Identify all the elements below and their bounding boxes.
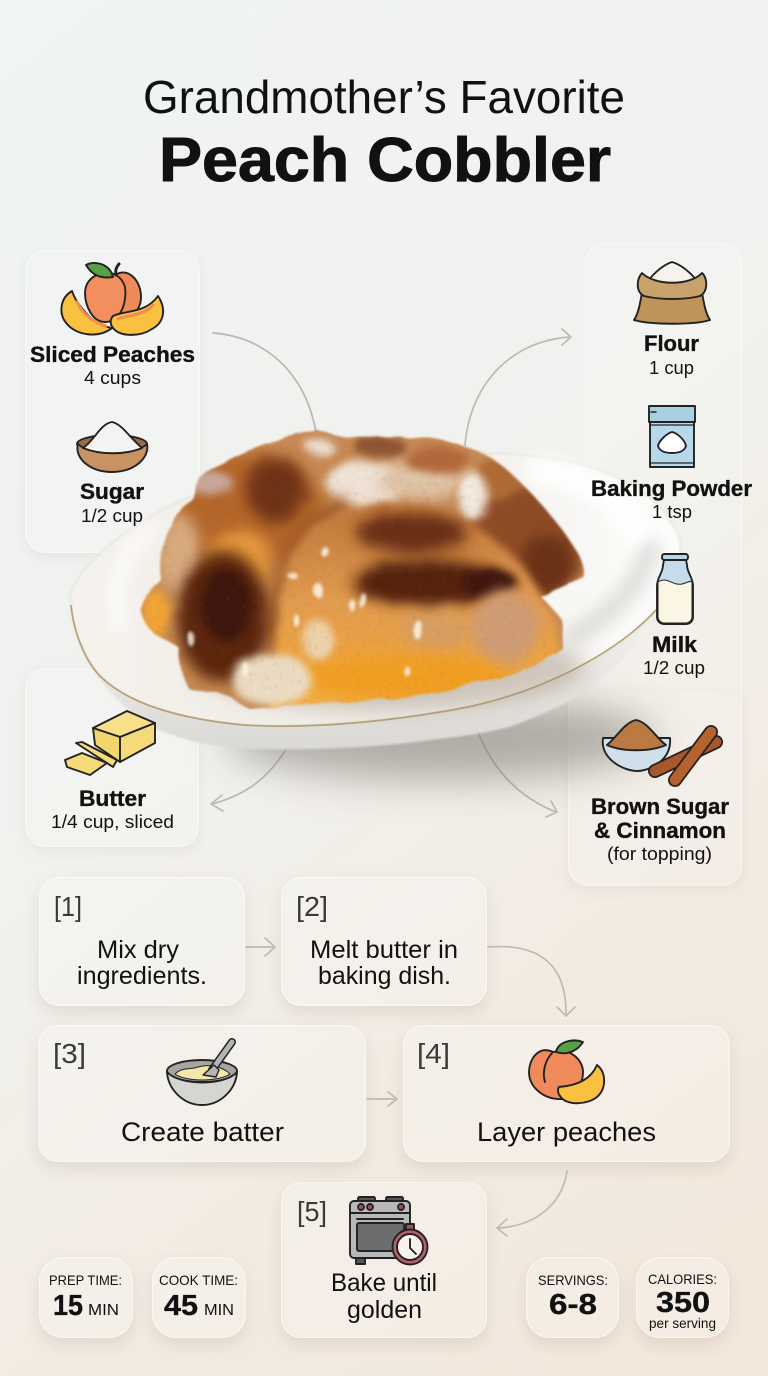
label: milk: Milk [652,632,698,657]
label: baking powder: Baking Powder [591,476,752,501]
icon: sliced peaches [61,263,163,335]
stat: servings: 6-8 [549,1289,597,1321]
icon: milk bottle [657,554,693,624]
step 2 text: Melt butter in [310,936,458,964]
label: butter: 1/4 cup, sliced [51,812,174,832]
plate gold rim [71,605,656,726]
panel: prep time [39,1257,133,1338]
label: butter [51,786,174,832]
icon: oven with timer [350,1197,428,1264]
step 5 number: [5] [297,1196,327,1227]
label: flour: 1 cup [649,358,694,378]
plate cast shadow [225,696,655,780]
cobbler photo on plate [70,425,680,780]
icon: batter bowl [167,1042,237,1105]
panel: cook time [152,1257,246,1338]
label: baking powder: 1 tsp [652,502,692,522]
step 5 text [331,1269,437,1324]
arrow: step 2 to step 4 [488,947,575,1016]
stat: calories [648,1271,717,1331]
arrow: dish to flour [465,329,571,445]
label: butter: Butter [79,786,146,811]
plate underside [72,606,658,749]
step 1 text [54,891,207,990]
label: sliced peaches: 4 cups [84,368,141,388]
label: sliced peaches: Sliced Peaches [30,342,195,367]
step 5 text: golden [347,1296,422,1324]
title [143,71,625,195]
stat: prep time: 15 [53,1290,83,1322]
panel: step 2 [281,877,487,1006]
arrow: step 4 to step 5 [497,1171,567,1236]
title: Peach Cobbler [159,126,611,195]
arrow: sliced peaches to dish [213,333,316,432]
label: sugar: 1/2 cup [81,506,143,526]
label: flour: Flour [644,331,699,356]
label: sugar: Sugar [80,479,144,504]
stat: prep time [49,1272,122,1322]
label: brown sugar and cinnamon: & Cinnamon [594,818,726,843]
stat: calories: 350 [656,1287,710,1319]
icon: butter [65,711,155,775]
step 4 text: Layer peaches [477,1117,656,1147]
stat: prep time: MIN [88,1302,119,1319]
icon: flour sack [634,262,710,324]
arrow: dish to brown sugar [477,729,557,817]
panel: step 3 [38,1025,366,1162]
panel: step 4 [403,1025,730,1162]
icon: baking powder packet [649,406,695,467]
stat: servings: SERVINGS: [538,1272,608,1288]
arrow: step 3 to step 4 [367,1092,397,1106]
label: sliced peaches [30,342,195,388]
step 1 text: [1] [54,891,82,922]
panel: step 1 [39,877,245,1006]
label: brown sugar and cinnamon: (for topping) [607,844,712,864]
stat: calories: per serving [649,1315,716,1331]
step 3 number: [3] [53,1038,86,1069]
plate inner shading [116,470,650,635]
step 2 text: baking dish. [318,962,451,990]
label: brown sugar and cinnamon: Brown Sugar [591,794,729,819]
label: flour [644,331,699,378]
panel: servings [526,1257,619,1338]
arrows and cobbler photo layer [69,328,679,1237]
plate top surface [70,453,680,726]
cobbler soft shadow on plate [195,626,585,710]
stat: cook time [159,1272,238,1322]
step 2 text [296,891,458,990]
label: sugar [80,479,144,526]
label: brown sugar and cinnamon [591,794,729,864]
label: milk: 1/2 cup [643,658,705,678]
step 1 text: Mix dry [97,936,180,964]
arrow: dish to butter [211,751,285,811]
panel: butter [25,668,199,847]
stat: cook time: 45 [164,1290,198,1322]
panel: brown sugar and cinnamon [568,691,742,886]
panel: step 5 [281,1182,487,1338]
label: baking powder [591,476,752,522]
stat: calories: CALORIES: [648,1271,717,1287]
icon: brown sugar and cinnamon [603,720,716,780]
step 3 text: Create batter [121,1117,284,1147]
stat: servings [538,1272,608,1321]
label: milk [643,632,705,678]
stat: cook time: MIN [204,1302,234,1319]
arrow: step 1 to step 2 [246,938,275,956]
icon: sugar bowl [77,422,147,472]
step 2 text: [2] [296,891,328,922]
title: Grandmother’s Favorite [143,71,625,123]
panel: left top ingredients [25,250,200,553]
step 4 number: [4] [417,1038,450,1069]
panel: calories [636,1257,729,1338]
cobbler [130,425,600,720]
step 1 text: ingredients. [77,962,207,990]
step 5 text: Bake until [331,1269,437,1297]
panel: right top ingredients [585,243,742,691]
icon: peach with slice [529,1040,604,1103]
stat: prep time: PREP TIME: [49,1272,122,1288]
stat: cook time: COOK TIME: [159,1272,238,1288]
